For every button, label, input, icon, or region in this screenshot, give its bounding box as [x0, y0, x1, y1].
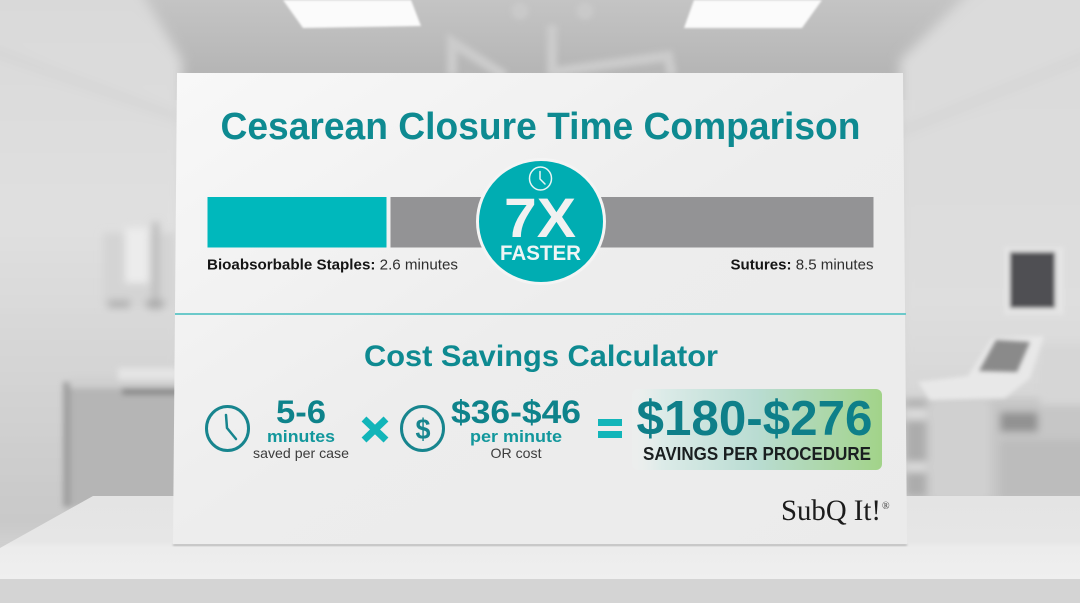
monitor: [1004, 247, 1064, 315]
board: [173, 73, 907, 546]
title: Cesarean Closure Time Comparison: [220, 106, 860, 148]
icon: dollar: $: [416, 414, 430, 446]
equals sign: [598, 419, 622, 438]
ceiling lights: [283, 0, 421, 28]
value: total savings: $180-$276: [636, 392, 872, 446]
caption: savings per procedure: SAVINGS PER PROCEDURE: [643, 444, 871, 464]
multiply sign: [364, 419, 386, 440]
ceiling: [0, 0, 1080, 100]
calculator: [206, 389, 882, 470]
label: bioabsorbable staples: Bioabsorbable Staples: 2.6 minutes: [207, 256, 458, 274]
logo: SubQ It!: SubQ It!: [781, 494, 881, 527]
logo: SubQ It!: ®: [882, 501, 890, 512]
value: minutes saved: 5-6: [276, 394, 326, 430]
icon: clock: [530, 167, 552, 190]
value: minutes saved: minutes: [267, 427, 335, 446]
surgical lamp arm: [452, 8, 672, 76]
left cabinet: [63, 368, 188, 507]
bar: staples: [208, 197, 386, 248]
bar: sutures: [390, 197, 874, 248]
icon: dollar: [402, 406, 444, 450]
icon: clock: [206, 406, 248, 450]
result box: [632, 389, 882, 470]
divider: [175, 313, 906, 315]
label: sutures: Sutures: 8.5 minutes: [730, 256, 874, 274]
badge: 7X faster: [478, 160, 604, 284]
text: FASTER: FASTER: [500, 242, 581, 265]
value: cost per minute: per minute: [470, 427, 562, 446]
bar chart: closure time: [207, 197, 874, 274]
heading: cost savings calculator: Cost Savings Calculator: [364, 340, 718, 373]
value: cost per minute: $36-$46: [451, 394, 581, 430]
value: minutes saved: [253, 394, 349, 461]
text: 7X: 7X: [504, 186, 576, 249]
dispenser on left wall: [103, 222, 175, 310]
ultrasound machine: [900, 345, 1080, 508]
white table: [0, 496, 1080, 603]
value: cost per minute: OR cost: [490, 445, 542, 461]
value: cost per minute: [451, 394, 581, 461]
value: minutes saved: saved per case: [253, 445, 349, 461]
